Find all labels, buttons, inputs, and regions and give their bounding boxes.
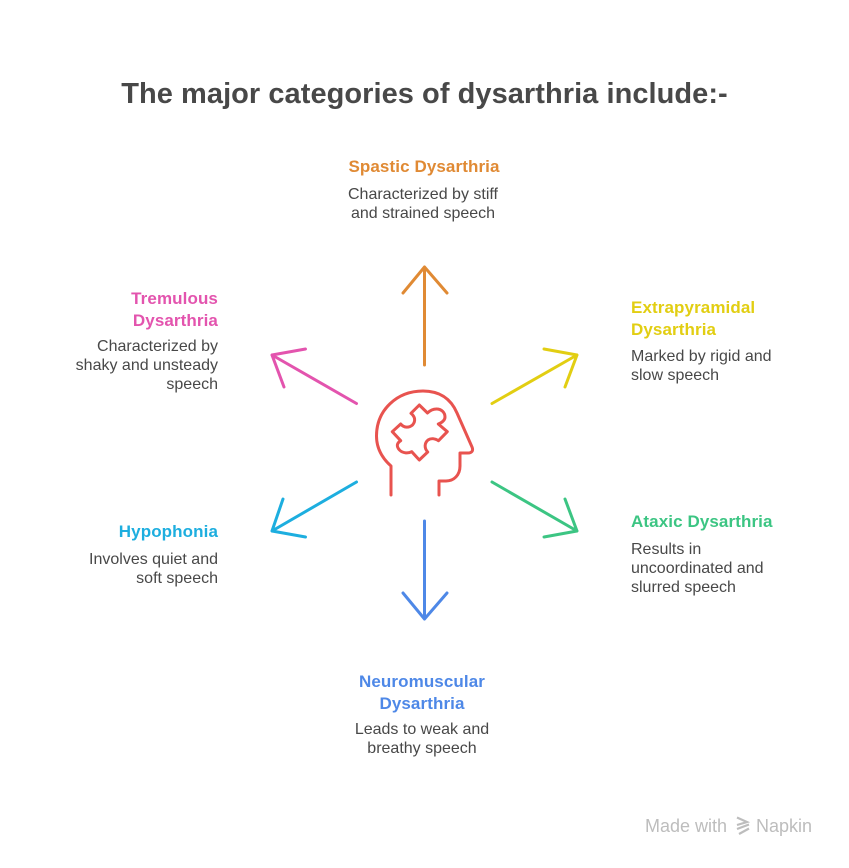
arrow: to tremulous xyxy=(272,349,356,404)
watermark: made with napkin: Napkin xyxy=(756,816,812,836)
text: spastic description xyxy=(348,186,498,222)
arrow: to hypophonia xyxy=(272,482,356,537)
heading: extrapyramidal: Extrapyramidal xyxy=(631,298,755,317)
arrow: up to spastic xyxy=(403,267,447,365)
watermark: made with napkin xyxy=(645,816,812,836)
heading: hypophonia: Hypophonia xyxy=(119,522,218,541)
icon: head with puzzle piece xyxy=(376,391,473,495)
heading: ataxic: Ataxic Dysarthria xyxy=(631,512,773,531)
icon: napkin logo xyxy=(736,816,750,835)
text: hypophonia description xyxy=(89,551,218,587)
text: neuromuscular description: Leads to weak and xyxy=(355,721,489,738)
heading: extrapyramidal xyxy=(631,298,755,339)
text: ataxic description: uncoordinated and xyxy=(631,560,764,577)
arrow: down to neuromuscular xyxy=(403,521,447,619)
text: neuromuscular description xyxy=(355,721,489,757)
heading: tremulous: Dysarthria xyxy=(133,311,218,330)
heading: spastic dysarthria: Spastic Dysarthria xyxy=(348,157,500,176)
text: hypophonia description: Involves quiet and xyxy=(89,551,218,568)
text: neuromuscular description: breathy speech xyxy=(367,740,477,757)
text: extrapyramidal description: slow speech xyxy=(631,367,719,384)
arrow: to extrapyramidal xyxy=(492,349,577,404)
text: hypophonia description: soft speech xyxy=(136,570,218,587)
text: tremulous description: speech xyxy=(166,376,218,393)
title: The major categories of dysarthria include:- xyxy=(121,78,728,110)
text: ataxic description: slurred speech xyxy=(631,579,736,596)
text: tremulous description: Characterized by xyxy=(97,338,218,355)
heading: neuromuscular xyxy=(359,672,485,713)
heading: neuromuscular: Neuromuscular xyxy=(359,672,485,691)
text: ataxic description: Results in xyxy=(631,541,701,558)
text: spastic description: and strained speech xyxy=(351,205,495,222)
watermark: made with napkin: Made with xyxy=(645,816,727,836)
heading: tremulous xyxy=(131,289,218,330)
text: tremulous description xyxy=(76,338,218,393)
text: spastic description: Characterized by stiff xyxy=(348,186,498,203)
text: extrapyramidal description: Marked by rigid and xyxy=(631,348,772,365)
arrow: to ataxic xyxy=(492,482,577,537)
heading: tremulous: Tremulous xyxy=(131,289,218,308)
heading: neuromuscular: Dysarthria xyxy=(379,694,465,713)
heading: extrapyramidal: Dysarthria xyxy=(631,320,716,339)
text: ataxic description xyxy=(631,541,764,596)
text: extrapyramidal description xyxy=(631,348,772,384)
text: tremulous description: shaky and unsteady xyxy=(76,357,218,374)
